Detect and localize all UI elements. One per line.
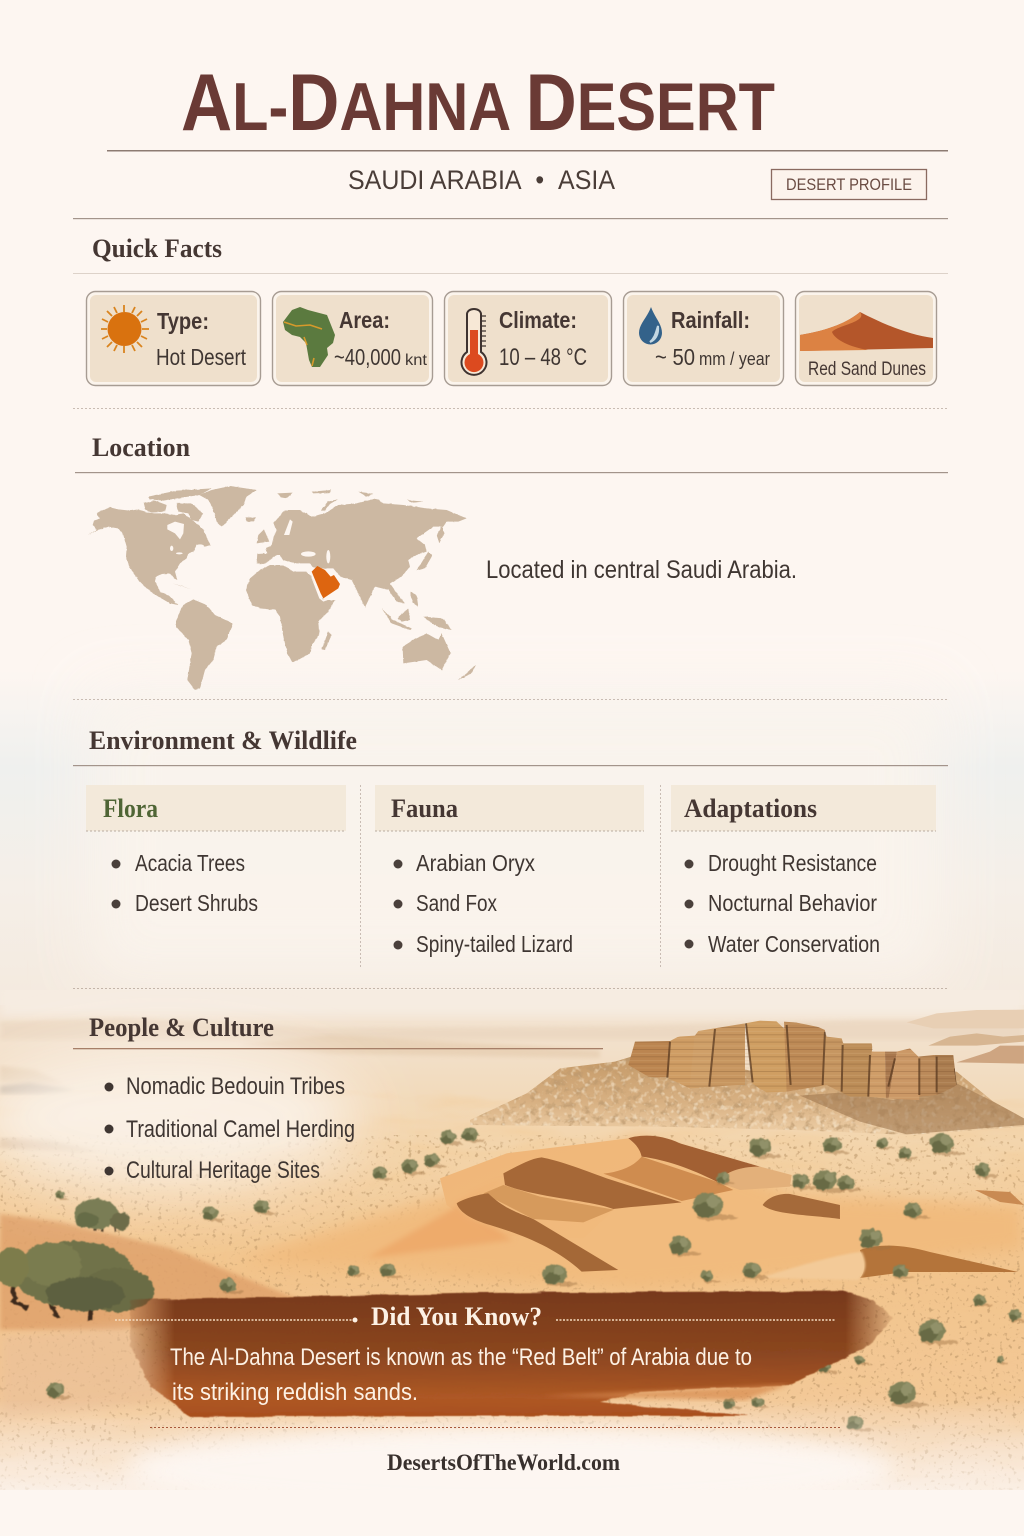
card: climate <box>444 292 612 386</box>
panel: fauna: Sand Fox <box>416 890 497 916</box>
world map <box>87 486 476 690</box>
card: rainfall: Rainfall: <box>671 307 750 333</box>
mesa rock <box>627 1018 960 1102</box>
badge: desert profile: DESERT PROFILE <box>786 175 912 194</box>
card: climate: 10 – 48 °C <box>499 344 587 371</box>
list: people and culture <box>104 1073 355 1184</box>
card: type: Type: <box>157 308 209 334</box>
location text: Located in central Saudi Arabia. <box>486 556 797 584</box>
title rule <box>107 150 948 152</box>
card: climate: Climate: <box>499 307 577 333</box>
panel: did you know: The Al-Dahna Desert is known as the “Red Belt” of Arabia due to <box>170 1344 752 1371</box>
main dune field <box>0 1136 1024 1420</box>
heading: quick facts: Quick Facts <box>92 234 222 263</box>
panel: flora: Flora <box>103 794 158 823</box>
card: area: ~40,000 <box>334 344 401 370</box>
icon: africa map <box>283 307 335 367</box>
bushes <box>46 1128 1024 1432</box>
panel: adaptations <box>671 785 936 957</box>
talus slope <box>470 1055 1024 1135</box>
footer: DesertsOfTheWorld.com <box>387 1450 620 1475</box>
icon: dune <box>800 312 933 351</box>
card: rainfall: mm / year <box>699 349 770 369</box>
icon: thermometer <box>462 309 486 375</box>
card: red sand dunes: Red Sand Dunes <box>808 359 926 380</box>
panel: fauna: Spiny-tailed Lizard <box>416 931 573 957</box>
sand grain texture <box>0 1135 1024 1490</box>
list: people and culture: Nomadic Bedouin Tribes <box>126 1073 345 1100</box>
panel: adaptations: Water Conservation <box>708 931 880 957</box>
card: type <box>86 292 260 386</box>
panel: did you know: its striking reddish sands. <box>172 1379 418 1406</box>
sky haze backdrop <box>0 670 1024 1020</box>
panel: fauna <box>375 785 644 957</box>
list: people and culture: Cultural Heritage Sites <box>126 1157 320 1184</box>
acacia tree small <box>74 1199 130 1232</box>
card: area: knt <box>405 352 428 369</box>
list: people and culture: Traditional Camel Herding <box>126 1116 355 1143</box>
left haze behind text <box>0 1046 360 1190</box>
panel: flora <box>86 785 346 916</box>
heading: did you know: Did You Know? <box>371 1302 542 1331</box>
heading: people and culture: People & Culture <box>89 1013 274 1042</box>
card: area <box>272 292 432 386</box>
heading: environment and wildlife: Environment & Wildlife <box>89 726 357 755</box>
panel: adaptations: Drought Resistance <box>708 850 877 876</box>
subtitle: SAUDI ARABIA • ASIA <box>348 165 615 195</box>
highlight: Arabian Peninsula <box>310 566 340 602</box>
panel: adaptations: Nocturnal Behavior <box>708 890 877 916</box>
acacia tree large <box>0 1241 154 1320</box>
panel: quick facts cards <box>86 292 936 386</box>
bottom fade <box>0 1400 1024 1490</box>
distant hills <box>907 1010 1024 1064</box>
panel: fauna: Arabian Oryx <box>416 850 535 876</box>
icon: sun <box>101 305 149 353</box>
panel: did you know <box>115 1291 893 1417</box>
card: rainfall: ~ 50 <box>655 344 695 370</box>
card: red sand dunes <box>796 292 936 386</box>
badge: desert profile <box>772 170 926 200</box>
card: type: Hot Desert <box>156 344 246 370</box>
icon: water drop <box>639 307 662 344</box>
bottom page strip <box>0 1490 1024 1536</box>
panel: adaptations: Adaptations <box>684 794 817 823</box>
desert landscape illustration <box>0 985 1024 1516</box>
panel: fauna: Fauna <box>391 794 458 823</box>
title: AL-DAHNA DESERT <box>181 58 775 148</box>
card: rainfall <box>624 292 784 386</box>
soft dune masses <box>235 1135 1024 1290</box>
heading: location: Location <box>92 433 191 462</box>
panel: flora: Acacia Trees <box>135 850 245 876</box>
card: area: Area: <box>339 307 390 333</box>
panel: flora: Desert Shrubs <box>135 890 258 916</box>
